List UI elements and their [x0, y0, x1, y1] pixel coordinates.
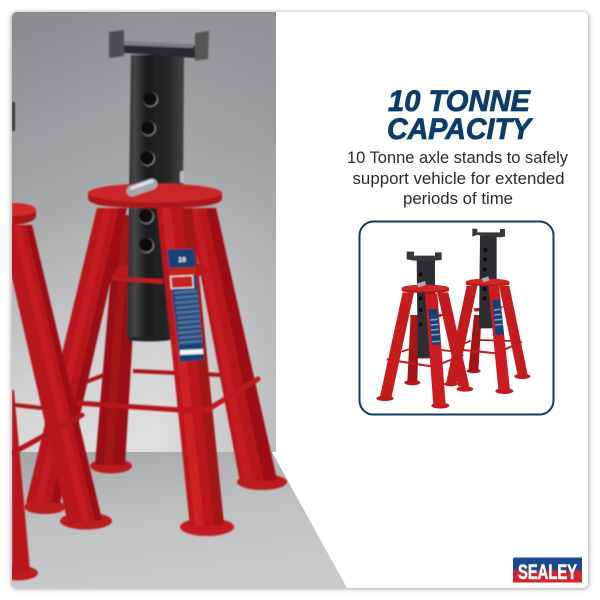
table disc — [88, 184, 222, 208]
back ring — [86, 371, 221, 382]
main stand — [24, 30, 287, 536]
description text: 10 Tonne axle stands to safely — [347, 149, 569, 167]
inset frame — [360, 222, 554, 414]
inset: pair of axle stands — [376, 228, 530, 409]
floor — [12, 452, 347, 588]
back leg — [89, 214, 134, 474]
heading: CAPACITY — [387, 113, 533, 146]
heading: 10 TONNE — [388, 85, 531, 118]
front leg — [157, 208, 234, 536]
wall shading — [200, 12, 276, 452]
inset left stand — [376, 252, 473, 409]
photo panel: main axle stand — [0, 12, 347, 588]
heading — [387, 85, 533, 146]
sealey logo — [513, 558, 582, 584]
label number: 10 — [178, 257, 186, 264]
second stand ring — [12, 415, 82, 453]
wall background — [12, 12, 276, 452]
second stand disc — [12, 203, 36, 225]
description text: support vehicle for extended — [352, 170, 564, 188]
leg label — [167, 249, 204, 362]
right leg — [188, 208, 287, 490]
second stand saddle edge — [12, 102, 15, 131]
inset right stand — [444, 228, 530, 394]
second stand, left edge — [0, 102, 112, 580]
second stand far leg — [12, 389, 39, 582]
front ring — [77, 379, 258, 410]
fork saddle — [109, 30, 209, 61]
locking pin — [132, 171, 184, 191]
left leg — [24, 208, 127, 514]
front ring right over leg — [207, 379, 258, 410]
second stand back ring — [15, 405, 42, 408]
second stand front leg — [0, 225, 112, 530]
description text — [347, 149, 569, 208]
column — [127, 55, 184, 342]
description text: periods of time — [403, 190, 513, 208]
holes — [139, 92, 158, 253]
shelf front band — [111, 277, 163, 284]
logo wordmark: SEALEY — [518, 561, 577, 584]
logo background — [513, 558, 582, 582]
shelf plate — [111, 263, 208, 278]
